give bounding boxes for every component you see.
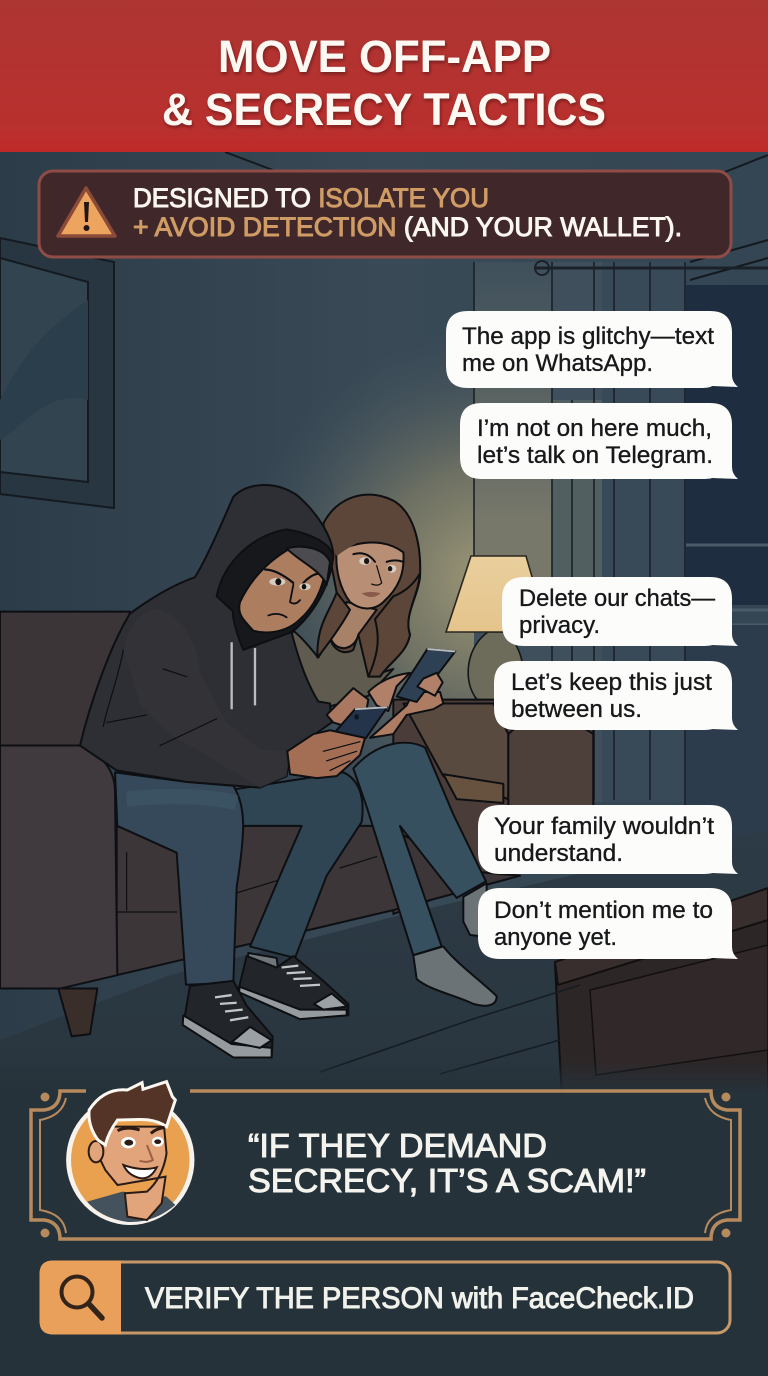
chat bubble: WhatsApp: The app is glitchy—text bbox=[462, 323, 714, 350]
wall picture frame bbox=[0, 238, 114, 508]
chat bubble: family: understand. bbox=[494, 840, 623, 867]
chat bubble: between us: Let’s keep this just bbox=[511, 669, 712, 696]
ornate frame bbox=[31, 1091, 740, 1239]
chat bubble: between us: between us. bbox=[511, 696, 642, 723]
warning text: + AVOID DETECTION (AND YOUR WALLET). bbox=[133, 212, 682, 242]
table lamp bbox=[446, 556, 548, 702]
man: jeans bbox=[115, 772, 363, 985]
icon: warning triangle bbox=[58, 188, 115, 236]
woman: neck bbox=[331, 602, 377, 648]
chat bubble: family bbox=[478, 805, 738, 874]
floor bbox=[0, 830, 768, 1100]
chat bubble: don't mention: anyone yet. bbox=[494, 924, 617, 951]
chat bubble: Telegram: let’s talk on Telegram. bbox=[477, 442, 713, 469]
avatar: smiling man thinking bbox=[66, 1082, 194, 1225]
woman: hair front locks bbox=[317, 573, 420, 677]
side table bbox=[555, 888, 768, 1100]
chat bubble: delete chats bbox=[502, 577, 738, 646]
man: hoodie bbox=[80, 485, 333, 788]
quote panel bbox=[31, 1082, 740, 1239]
chat bubble: WhatsApp bbox=[446, 311, 738, 388]
illustration: couple on sofa bbox=[0, 485, 593, 1057]
man: shoes bbox=[183, 953, 348, 1057]
woman: shirt bbox=[242, 631, 393, 742]
title: MOVE OFF-APP bbox=[218, 31, 551, 82]
background room scene bbox=[0, 150, 768, 1100]
woman: face bbox=[332, 520, 404, 609]
man: face bbox=[239, 547, 330, 632]
chat bubble: don't mention bbox=[478, 888, 738, 959]
chat bubble: delete chats: Delete our chats— bbox=[519, 585, 715, 612]
curtains bbox=[474, 261, 768, 810]
man: phone and hands bbox=[287, 688, 387, 778]
chat bubble: Telegram: I’m not on here much, bbox=[477, 415, 712, 442]
bottom dark panel bbox=[0, 1060, 768, 1376]
warning text: DESIGNED TO ISOLATE YOU bbox=[133, 183, 489, 213]
verify call-to-action bar bbox=[40, 1260, 730, 1334]
title bbox=[162, 31, 606, 135]
chat bubble: Telegram bbox=[460, 403, 738, 479]
woman: arm hand and phone bbox=[368, 649, 455, 738]
verify text: VERIFY THE PERSON with FaceCheck.ID bbox=[145, 1282, 694, 1315]
warning text bbox=[133, 183, 682, 242]
sofa bbox=[0, 612, 593, 1036]
title: & SECRECY TACTICS bbox=[162, 84, 606, 135]
chat bubble: WhatsApp: me on WhatsApp. bbox=[462, 350, 653, 377]
floor rug lines bbox=[320, 985, 580, 1074]
search icon tab bbox=[40, 1260, 121, 1334]
quote text bbox=[248, 1127, 646, 1199]
chat bubble: don't mention: Don’t mention me to bbox=[494, 897, 713, 924]
header band bbox=[0, 0, 768, 152]
quote text: SECRECY, IT’S A SCAM!” bbox=[248, 1162, 646, 1199]
woman: hair back bbox=[320, 495, 420, 677]
chat bubble: family: Your family wouldn’t bbox=[494, 813, 714, 840]
quote text: “IF THEY DEMAND bbox=[248, 1127, 547, 1164]
chat bubble: between us bbox=[494, 661, 738, 730]
night window bbox=[686, 285, 768, 895]
woman: legs and sock bbox=[353, 743, 497, 1006]
warning banner bbox=[39, 171, 731, 257]
chat bubble: delete chats: privacy. bbox=[519, 612, 600, 639]
